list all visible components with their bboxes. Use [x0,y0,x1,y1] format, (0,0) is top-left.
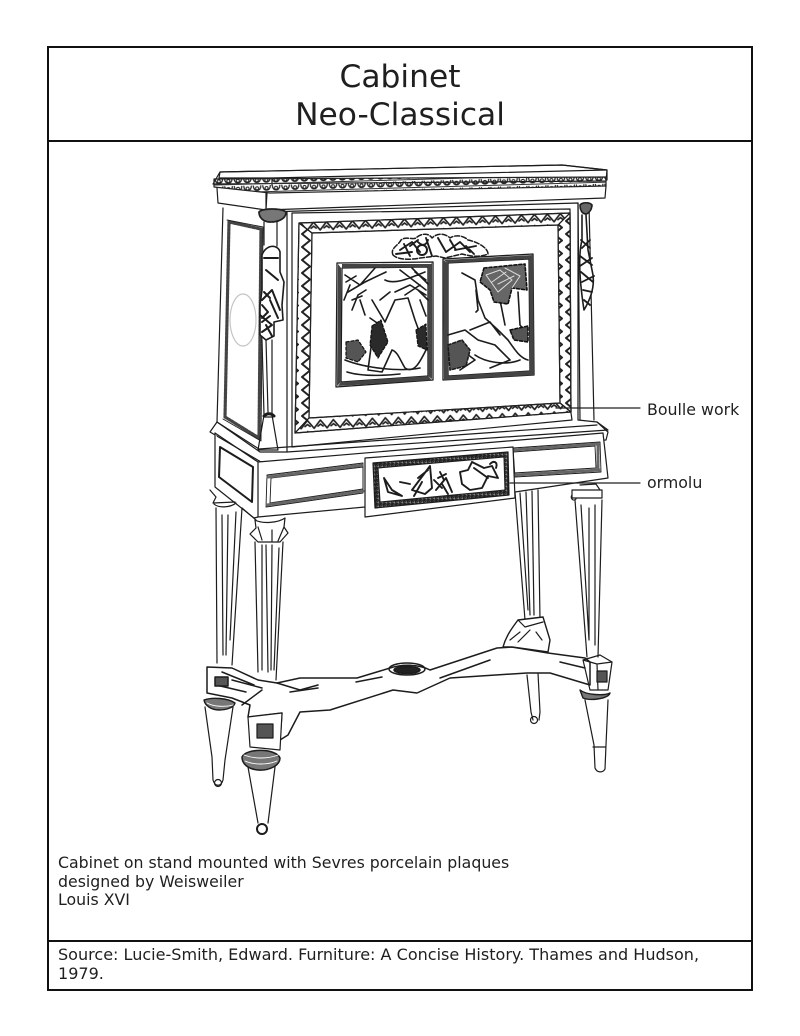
source citation: 1979. [58,964,104,983]
cabinet body [210,203,608,462]
ormolu corner figure [258,209,286,450]
side panel [223,220,263,441]
label: Boulle work: Boulle work [647,400,739,419]
crest ornament [392,234,488,259]
cornice top [213,165,607,210]
right legs [515,484,602,657]
caption: Louis XVI [58,890,130,909]
apron [215,433,608,518]
faint oval on side panel [230,294,256,346]
right plaque scene [443,254,534,380]
feet [204,655,612,834]
stretcher leaf mount [503,617,550,652]
title: Neo-Classical [295,97,505,133]
boulle work border [295,213,571,433]
left plaque scene [336,262,433,387]
caption: designed by Weisweiler [58,872,244,891]
title: Cabinet [340,59,460,95]
source citation [58,945,699,983]
leader lines [510,408,640,483]
source citation: Source: Lucie-Smith, Edward. Furniture: A Concise History. Thames and Hudson, [58,945,699,964]
caption [58,853,509,909]
left back leg [210,490,256,665]
caption: Cabinet on stand mounted with Sevres porcelain plaques [58,853,509,872]
left front leg [250,518,288,680]
title [295,59,505,133]
stretcher [207,647,590,740]
label: ormolu: ormolu [647,473,702,492]
ormolu central plaque [365,447,515,517]
right pilaster ormolu [580,203,594,310]
